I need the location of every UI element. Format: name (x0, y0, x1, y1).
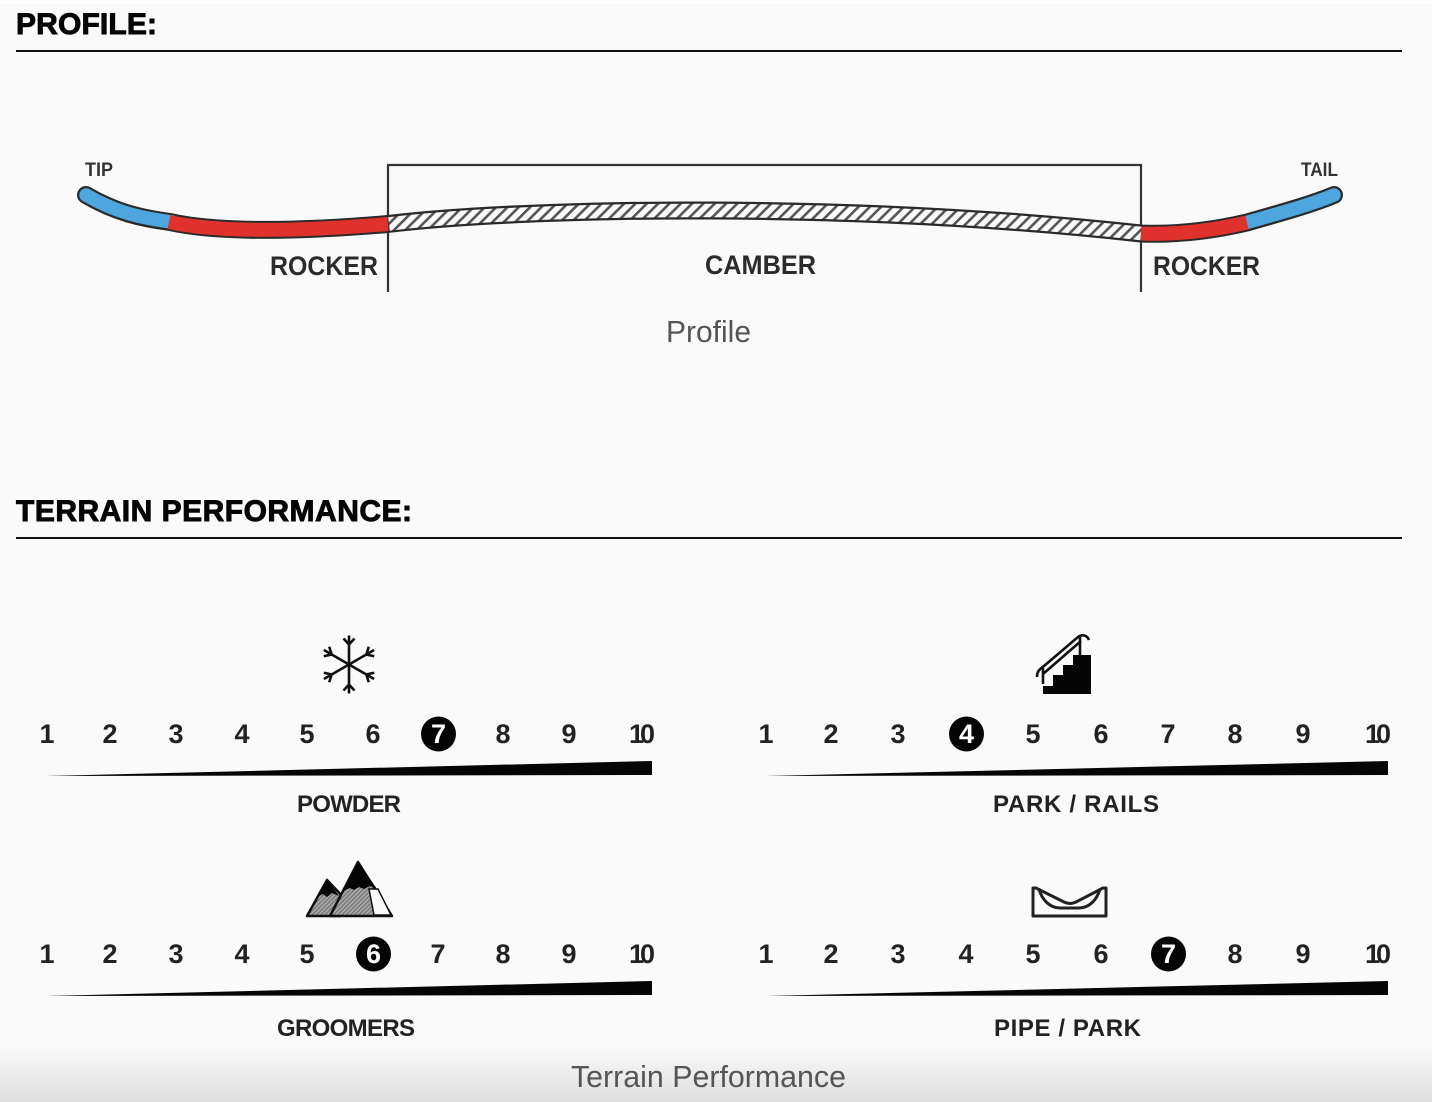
rating scale: park and rails: 3 (890, 719, 906, 749)
rating scale: groomers: 1 (39, 939, 55, 969)
rating scale: pipe and park: 1 (758, 939, 774, 969)
rating scale: park and rails: 4 (959, 719, 974, 749)
rating scale: pipe and park: 2 (823, 939, 839, 969)
rating scale: groomers: 5 (299, 939, 315, 969)
wedge bar (46, 981, 652, 996)
rating scale: pipe and park: 10 (1365, 939, 1390, 969)
rating scale: pipe and park: 9 (1295, 939, 1311, 969)
rating scale: groomers: 4 (234, 939, 250, 969)
label: left rocker: ROCKER (270, 251, 378, 281)
rating scale: groomers: 9 (561, 939, 577, 969)
rating scale: park and rails: 10 (1365, 719, 1390, 749)
rating scale: powder: 4 (234, 719, 250, 749)
rating scale: groomers: 10 (629, 939, 654, 969)
left rocker section (169, 222, 388, 230)
rating scale: pipe and park: 7 (1161, 939, 1176, 969)
rating scale: park and rails: 1 (758, 719, 774, 749)
rating scale: park and rails: 8 (1227, 719, 1243, 749)
rating scale: park and rails: 2 (823, 719, 839, 749)
rating scale: powder: 3 (168, 719, 184, 749)
caption: terrain performance: Terrain Performance (571, 1059, 846, 1094)
rating scale: park and rails: 7 (1160, 719, 1176, 749)
rating scale: pipe and park (758, 936, 1390, 996)
label: powder: POWDER (297, 791, 401, 818)
rating scale: groomers: 3 (168, 939, 184, 969)
rating scale: pipe and park: 6 (1093, 939, 1109, 969)
icon: halfpipe (1033, 888, 1106, 916)
wedge bar (766, 761, 1388, 776)
rating scale: pipe and park: 8 (1227, 939, 1243, 969)
rating scale: powder: 8 (495, 719, 511, 749)
label: right rocker: ROCKER (1153, 251, 1260, 281)
rating scale: groomers: 7 (430, 939, 446, 969)
camber bracket (388, 165, 1141, 292)
caption: profile: Profile (666, 314, 751, 349)
rating scale: powder: 1 (39, 719, 55, 749)
label: park and rails: PARK / RAILS (993, 791, 1159, 818)
rating scale: pipe and park: 4 (958, 939, 974, 969)
rating scale: groomers: 8 (495, 939, 511, 969)
heading: terrain performance: TERRAIN PERFORMANCE: (16, 495, 412, 528)
label: camber: CAMBER (705, 250, 816, 280)
rating scale: park and rails: 9 (1295, 719, 1311, 749)
rating scale: park and rails: 5 (1025, 719, 1041, 749)
label: tip: TIP (85, 160, 113, 181)
rating scale: groomers: 2 (102, 939, 118, 969)
label: groomers: GROOMERS (277, 1015, 415, 1042)
icon: mountains (307, 862, 392, 916)
camber section (389, 210, 1141, 234)
rating scale: powder: 2 (102, 719, 118, 749)
tip section (86, 195, 172, 222)
rating scale: park and rails (758, 716, 1390, 776)
rating scale: powder (39, 716, 654, 776)
rating scale: powder: 7 (431, 719, 446, 749)
right rocker section (1141, 222, 1247, 234)
label: pipe and park: PIPE / PARK (994, 1015, 1142, 1042)
rating scale: groomers: 6 (366, 939, 381, 969)
wedge bar (766, 981, 1388, 996)
rating scale: groomers (39, 936, 654, 996)
icon: stairs with rail (1037, 635, 1091, 694)
tail section (1245, 195, 1334, 223)
rating scale: pipe and park: 5 (1025, 939, 1041, 969)
board outline (86, 195, 1334, 234)
panel: snowboard profile diagram (85, 160, 1338, 292)
rating scale: powder: 10 (629, 719, 654, 749)
label: tail: TAIL (1301, 160, 1338, 181)
rating scale: park and rails: 6 (1093, 719, 1109, 749)
heading: profile: PROFILE: (16, 8, 157, 41)
rating scale: pipe and park: 3 (890, 939, 906, 969)
rating scale: powder: 5 (299, 719, 315, 749)
icon: snowflake (321, 636, 377, 694)
wedge bar (46, 761, 652, 776)
rating scale: powder: 6 (365, 719, 381, 749)
rating scale: powder: 9 (561, 719, 577, 749)
